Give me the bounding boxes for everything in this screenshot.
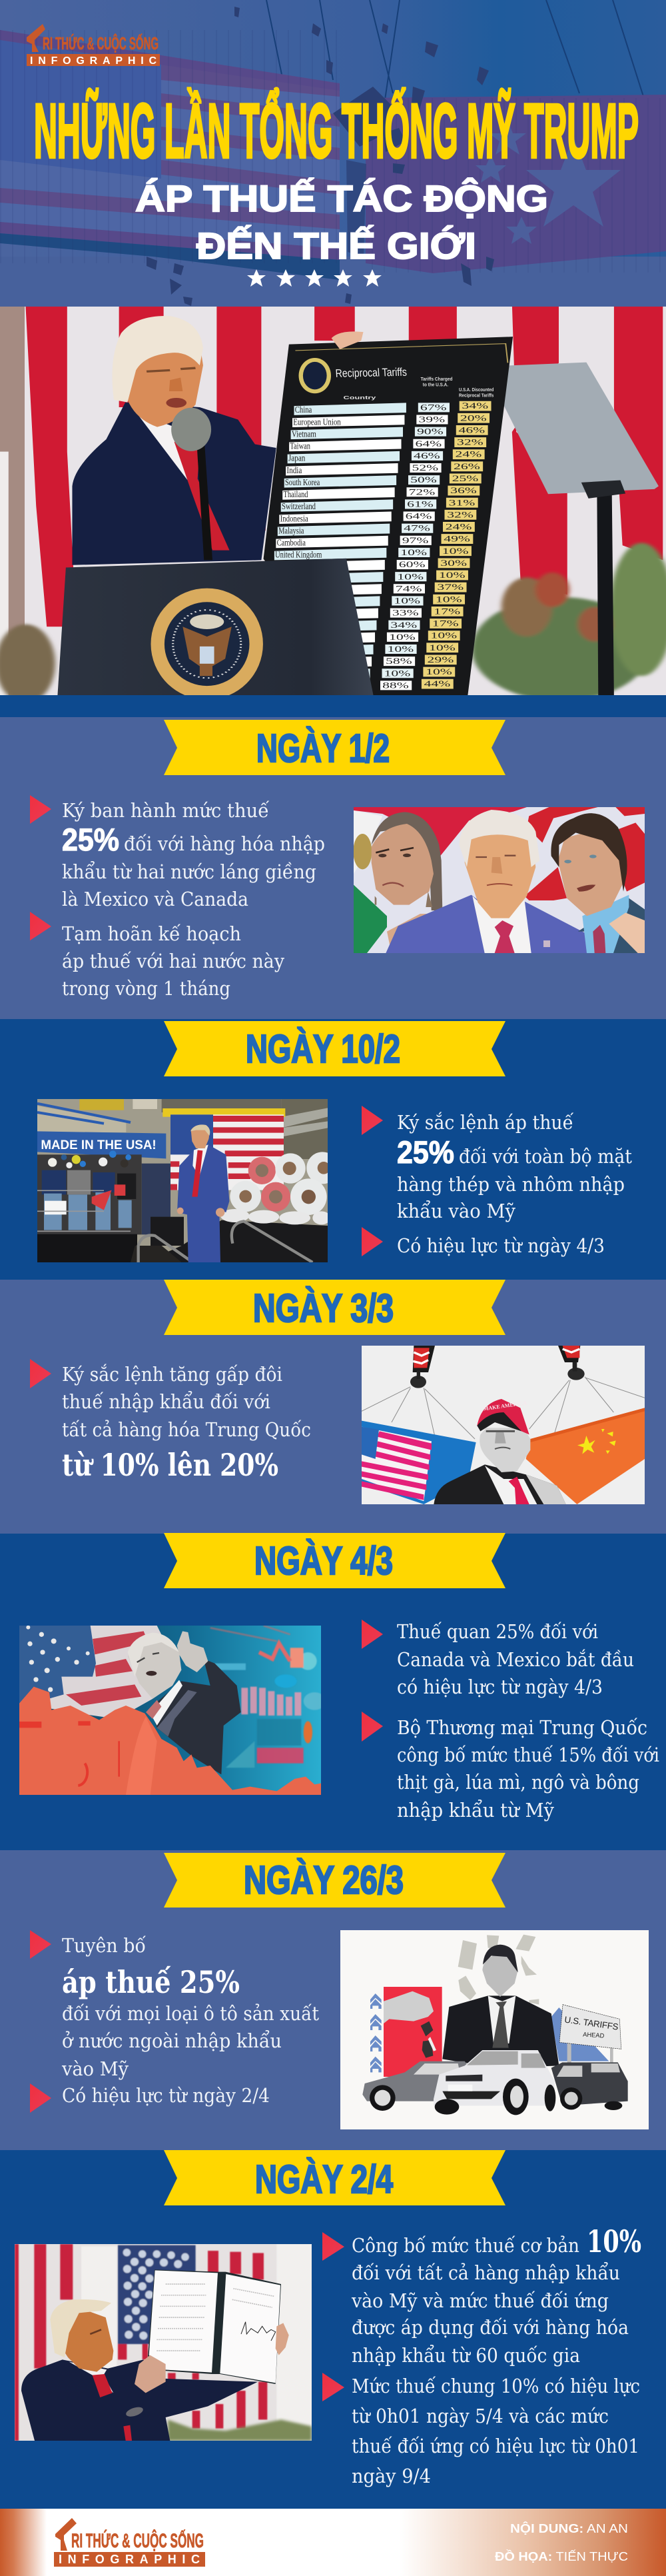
- text block 1: [61, 1934, 319, 2080]
- banner 3/3: NGÀY 3/3: [253, 1286, 394, 1330]
- money: [458, 1935, 539, 2005]
- tariffs board: 47%: [404, 523, 430, 533]
- cars: [362, 2050, 628, 2115]
- text block 1: đối với mọi loại ô tô sản xuất: [62, 2002, 319, 2025]
- text block 1: là Mexico và Canada: [62, 888, 248, 910]
- Trump in cap: [434, 1399, 566, 1504]
- text block: thuế nhập khẩu đối với: [62, 1390, 270, 1413]
- Trump: [21, 2299, 258, 2441]
- bullet icon: [30, 912, 51, 940]
- tariffs board: 17%: [432, 619, 459, 628]
- text block 2: Bộ Thương mại Trung Quốc: [397, 1716, 647, 1739]
- footer logo: INFOGRAPHIC: [59, 2553, 200, 2566]
- text block 1: [62, 799, 325, 910]
- tariffs board: 50%: [410, 475, 437, 485]
- bullet icon: [30, 1930, 51, 1959]
- text block 1: 10%: [587, 2223, 641, 2259]
- text block 1: có hiệu lực từ ngày 4/3: [397, 1676, 603, 1698]
- text block 2: trong vòng 1 tháng: [62, 977, 230, 1000]
- banner 4/3: NGÀY 4/3: [254, 1539, 393, 1583]
- hero photo: Trump holding reciprocal tariffs board: [0, 304, 666, 703]
- photo: Trump, cars and tariffs sign: [340, 1930, 649, 2129]
- text block 2: Có hiệu lực từ ngày 2/4: [62, 2084, 270, 2107]
- tariffs board: United Kingdom: [275, 550, 322, 560]
- tariffs board: Tariffs Charged: [421, 377, 452, 382]
- text block 1: Tuyên bố: [62, 1934, 146, 1957]
- railings: [139, 1221, 312, 1262]
- text block 1: vào Mỹ: [61, 2057, 129, 2080]
- made in the usa banner: MADE IN THE USA!: [41, 1138, 157, 1152]
- text block 1: Công bố mức thuế cơ bản: [352, 2234, 579, 2257]
- tariffs board: Switzerland: [282, 502, 316, 512]
- text block 1: 25%: [62, 822, 119, 857]
- tariffs board: to the U.S.A.: [423, 383, 448, 388]
- tariffs board: China: [295, 405, 312, 415]
- stars: [247, 269, 382, 287]
- microphone: [171, 408, 212, 560]
- text block 1: khẩu vào Mỹ: [397, 1199, 516, 1222]
- tariffs board: 44%: [424, 679, 451, 688]
- arrows: [370, 1993, 382, 2072]
- text block 2: Tạm hoãn kế hoạch: [62, 922, 241, 945]
- bullet icon: [322, 2373, 344, 2401]
- tariffs board: 25%: [452, 474, 479, 483]
- bullet icon: [30, 2083, 51, 2113]
- section: ngày 26/3: [0, 1850, 666, 2150]
- sign: [559, 2005, 621, 2063]
- banner 4/3: [164, 1533, 505, 1588]
- tariffs board: Vietnam: [292, 429, 316, 439]
- banner 26/3: NGÀY 26/3: [244, 1858, 404, 1902]
- Trudeau: [551, 813, 645, 953]
- tariffs board: 10%: [439, 571, 466, 580]
- credit: content: NỘI DUNG: AN AN: [510, 2521, 628, 2535]
- cranes: [362, 1346, 645, 1439]
- text block 1: hàng thép và nhôm nhập: [397, 1173, 625, 1196]
- banner 10/2: NGÀY 10/2: [246, 1027, 400, 1071]
- tariffs board: Country: [344, 395, 376, 401]
- tariffs board: 34%: [462, 401, 488, 411]
- text block 1: đối với hàng hóa nhập: [124, 832, 325, 855]
- text block 2: nhập khẩu từ Mỹ: [397, 1798, 555, 1822]
- red falling chart: [19, 1687, 321, 1795]
- tariffs board: 32%: [447, 510, 474, 519]
- tariffs board: 10%: [442, 546, 469, 556]
- logo: INFOGRAPHIC: [30, 55, 157, 67]
- tariffs board: 33%: [392, 608, 419, 617]
- section: ngày 1/2: [0, 717, 666, 1019]
- logo: RI THỨC & CUỘC SỐNG: [43, 33, 159, 53]
- text block 2: từ 0h01 ngày 5/4 và các mức: [352, 2405, 609, 2427]
- logo: [27, 24, 160, 67]
- text block 1: [351, 2223, 641, 2367]
- text block 1: nhập khẩu từ 60 quốc gia: [352, 2343, 580, 2367]
- text block: từ 10% lên 20%: [62, 1447, 278, 1483]
- crowd: [37, 1150, 142, 1234]
- tariffs board: Taiwan: [290, 441, 310, 451]
- banner 3/3: [164, 1280, 505, 1335]
- footer logo: [54, 2518, 205, 2567]
- photo: Trump holding signed order: [15, 2244, 312, 2441]
- banner 2/4: [164, 2150, 505, 2205]
- tariffs board: 52%: [412, 463, 439, 473]
- tariffs board: 30%: [440, 559, 467, 568]
- tariffs board: 24%: [446, 522, 472, 531]
- header panel: [0, 0, 666, 307]
- text block: [62, 1363, 311, 1483]
- Trump in cap: MAKE AMERICA: [483, 1400, 527, 1412]
- tariffs board: 39%: [418, 415, 445, 424]
- dark strip above section 1: [0, 695, 666, 717]
- banner 26/3: [164, 1853, 505, 1908]
- section: ngày 10/2: [0, 1019, 666, 1280]
- text block 2: [352, 2375, 640, 2487]
- bullet icon: [362, 1227, 383, 1256]
- tariffs board: 10%: [389, 633, 416, 642]
- sign: AHEAD: [583, 2031, 605, 2039]
- bullet icon: [362, 1712, 383, 1742]
- bullet icon: [30, 1359, 51, 1388]
- tariffs board: 58%: [386, 656, 412, 666]
- US container: [362, 1421, 476, 1504]
- Trump: [442, 1945, 559, 2068]
- section: ngày 2/4: [0, 2150, 666, 2509]
- title line 3: ĐẾN THẾ GIỚI: [196, 225, 476, 267]
- bullet icon: [30, 795, 51, 824]
- flag: [163, 1108, 285, 1190]
- text block: Ký sắc lệnh tăng gấp đôi: [62, 1363, 282, 1386]
- bullet icon: [362, 1620, 383, 1649]
- tariffs board: 90%: [417, 427, 444, 437]
- tariffs board: 88%: [382, 680, 409, 690]
- tariffs board: India: [286, 465, 302, 475]
- tariffs board: 31%: [449, 498, 476, 507]
- shrubs: [168, 2419, 312, 2441]
- made in the usa banner: [37, 1131, 166, 1158]
- text block 2: thuế đối ứng có hiệu lực từ 0h01: [352, 2435, 639, 2457]
- text block 2: thịt gà, lúa mì, ngô và bông: [397, 1771, 639, 1794]
- text block: tất cả hàng hóa Trung Quốc: [62, 1418, 311, 1441]
- tariffs board: 10%: [388, 644, 414, 654]
- tariffs board: 26%: [454, 462, 480, 471]
- tariffs board: 10%: [426, 667, 452, 676]
- text block 2: [397, 1716, 659, 1822]
- bullet icon: [362, 1106, 383, 1135]
- banner 10/2: [164, 1021, 505, 1076]
- steel coils: [220, 1152, 338, 1224]
- tariffs board: Malaysia: [278, 526, 304, 536]
- tariffs board: 49%: [444, 534, 470, 543]
- text block 2: Mức thuế chung 10% có hiệu lực: [352, 2375, 640, 2397]
- tariffs board: 60%: [399, 560, 426, 569]
- photo: containers and Trump in red cap: [362, 1346, 645, 1504]
- tariffs board: 64%: [406, 511, 432, 521]
- Trump: [177, 1124, 229, 1262]
- text block 1: Ký sắc lệnh áp thuế: [397, 1111, 574, 1134]
- text block 1: được áp dụng đối với hàng hóa: [352, 2316, 629, 2339]
- text block 2: áp thuế với hai nước này: [62, 950, 285, 972]
- tariffs board: 37%: [437, 583, 464, 592]
- tariffs board: 74%: [396, 584, 422, 593]
- tariffs board: 10%: [400, 548, 427, 557]
- teleprompter: [504, 363, 659, 695]
- section: ngày 3/3: [0, 1280, 666, 1534]
- footer: [0, 2509, 666, 2576]
- tariffs board: 34%: [390, 620, 417, 630]
- text block 2: Có hiệu lực từ ngày 4/3: [397, 1234, 605, 1257]
- background: debris: [147, 7, 494, 306]
- tariffs board: Cambodia: [277, 538, 306, 548]
- background: US container: [0, 30, 340, 280]
- title line 2: ÁP THUẾ TÁC ĐỘNG: [135, 177, 548, 219]
- text block 1: áp thuế 25%: [62, 1964, 240, 2000]
- tariffs board: 29%: [428, 655, 454, 664]
- sign: U.S. TARIFFS: [564, 2014, 619, 2032]
- text block 2: ngày 9/4: [352, 2465, 431, 2487]
- tariffs board: 10%: [431, 631, 458, 641]
- text block 1: [397, 1111, 632, 1222]
- tariffs board: South Korea: [285, 478, 320, 487]
- text block 1: 25%: [397, 1134, 454, 1170]
- tariffs board: U.S.A. Discounted: [459, 387, 494, 393]
- footer logo: RI THỨC & CUỘC SỐNG: [71, 2529, 204, 2552]
- tariffs board: Indonesia: [280, 514, 308, 524]
- tariffs board: Japan: [288, 453, 306, 463]
- tariffs board: 10%: [436, 595, 462, 604]
- tariffs board: 17%: [434, 607, 460, 616]
- tariffs board: Reciprocal Tariffs: [335, 366, 407, 380]
- text block 1: ở nước ngoài nhập khẩu: [62, 2029, 282, 2052]
- text block 1: Canada và Mexico bắt đầu: [397, 1648, 634, 1671]
- banner 1/2: NGÀY 1/2: [256, 726, 390, 770]
- tariffs board: 10%: [394, 596, 420, 605]
- Trump pointing: [128, 1631, 241, 1774]
- US flag: [19, 1626, 164, 1719]
- tariffs board: 67%: [420, 403, 447, 412]
- tariffs board: European Union: [293, 417, 341, 427]
- text block 2: [62, 922, 285, 1000]
- tariffs board: 10%: [429, 643, 456, 652]
- tariffs board: 72%: [409, 487, 436, 497]
- background: China container: [366, 95, 666, 273]
- tariffs board: 46%: [459, 425, 486, 435]
- tariffs board: 10%: [384, 668, 411, 678]
- text block 1: Ký ban hành mức thuế: [62, 799, 270, 822]
- tariffs board: 20%: [460, 413, 487, 423]
- photo: Trump at steel plant: [37, 1099, 328, 1262]
- bushes: [0, 543, 666, 703]
- tariffs board: 61%: [407, 499, 434, 509]
- photo: Sheinbaum, Trump, Trudeau: [354, 807, 645, 953]
- Trump: [386, 810, 595, 953]
- tariffs board: 36%: [450, 486, 477, 495]
- text block 1: Thuế quan 25% đối với: [397, 1620, 598, 1643]
- text block 1: khẩu từ hai nước láng giềng: [62, 860, 316, 883]
- bullet icon: [322, 2232, 344, 2261]
- tariffs board: 32%: [457, 437, 484, 447]
- banner 1/2: [164, 720, 505, 775]
- woman: [372, 812, 442, 953]
- signed document: [148, 2269, 289, 2384]
- text block 1: vào Mỹ và mức thuế đối ứng: [351, 2289, 609, 2312]
- hand with keys: [384, 1991, 436, 2058]
- tariffs board: [256, 337, 513, 698]
- text block 1: đối với toàn bộ mặt: [459, 1145, 632, 1168]
- speaker figure: [72, 316, 363, 565]
- text block 1: [397, 1620, 634, 1698]
- photo: Trump, US flag and falling market: [19, 1626, 321, 1795]
- tariffs board: 24%: [456, 449, 482, 459]
- market charts background: [210, 1626, 326, 1768]
- tariffs board: Thailand: [283, 490, 308, 500]
- podium with presidential seal: [57, 559, 374, 700]
- tariffs board: Reciprocal Tariffs: [459, 393, 494, 399]
- banner 2/4: NGÀY 2/4: [255, 2157, 393, 2201]
- section: ngày 4/3: [0, 1533, 666, 1850]
- tariffs board: 64%: [415, 439, 442, 449]
- China container: [526, 1408, 645, 1504]
- tariffs board: 10%: [397, 572, 424, 581]
- text block 1: đối với tất cả hàng nhập khẩu: [352, 2261, 620, 2284]
- tariffs board: 97%: [402, 536, 429, 545]
- credit: graphics: ĐỒ HỌA: TIẾN THỰC: [495, 2549, 628, 2563]
- tariffs board: 46%: [414, 451, 440, 461]
